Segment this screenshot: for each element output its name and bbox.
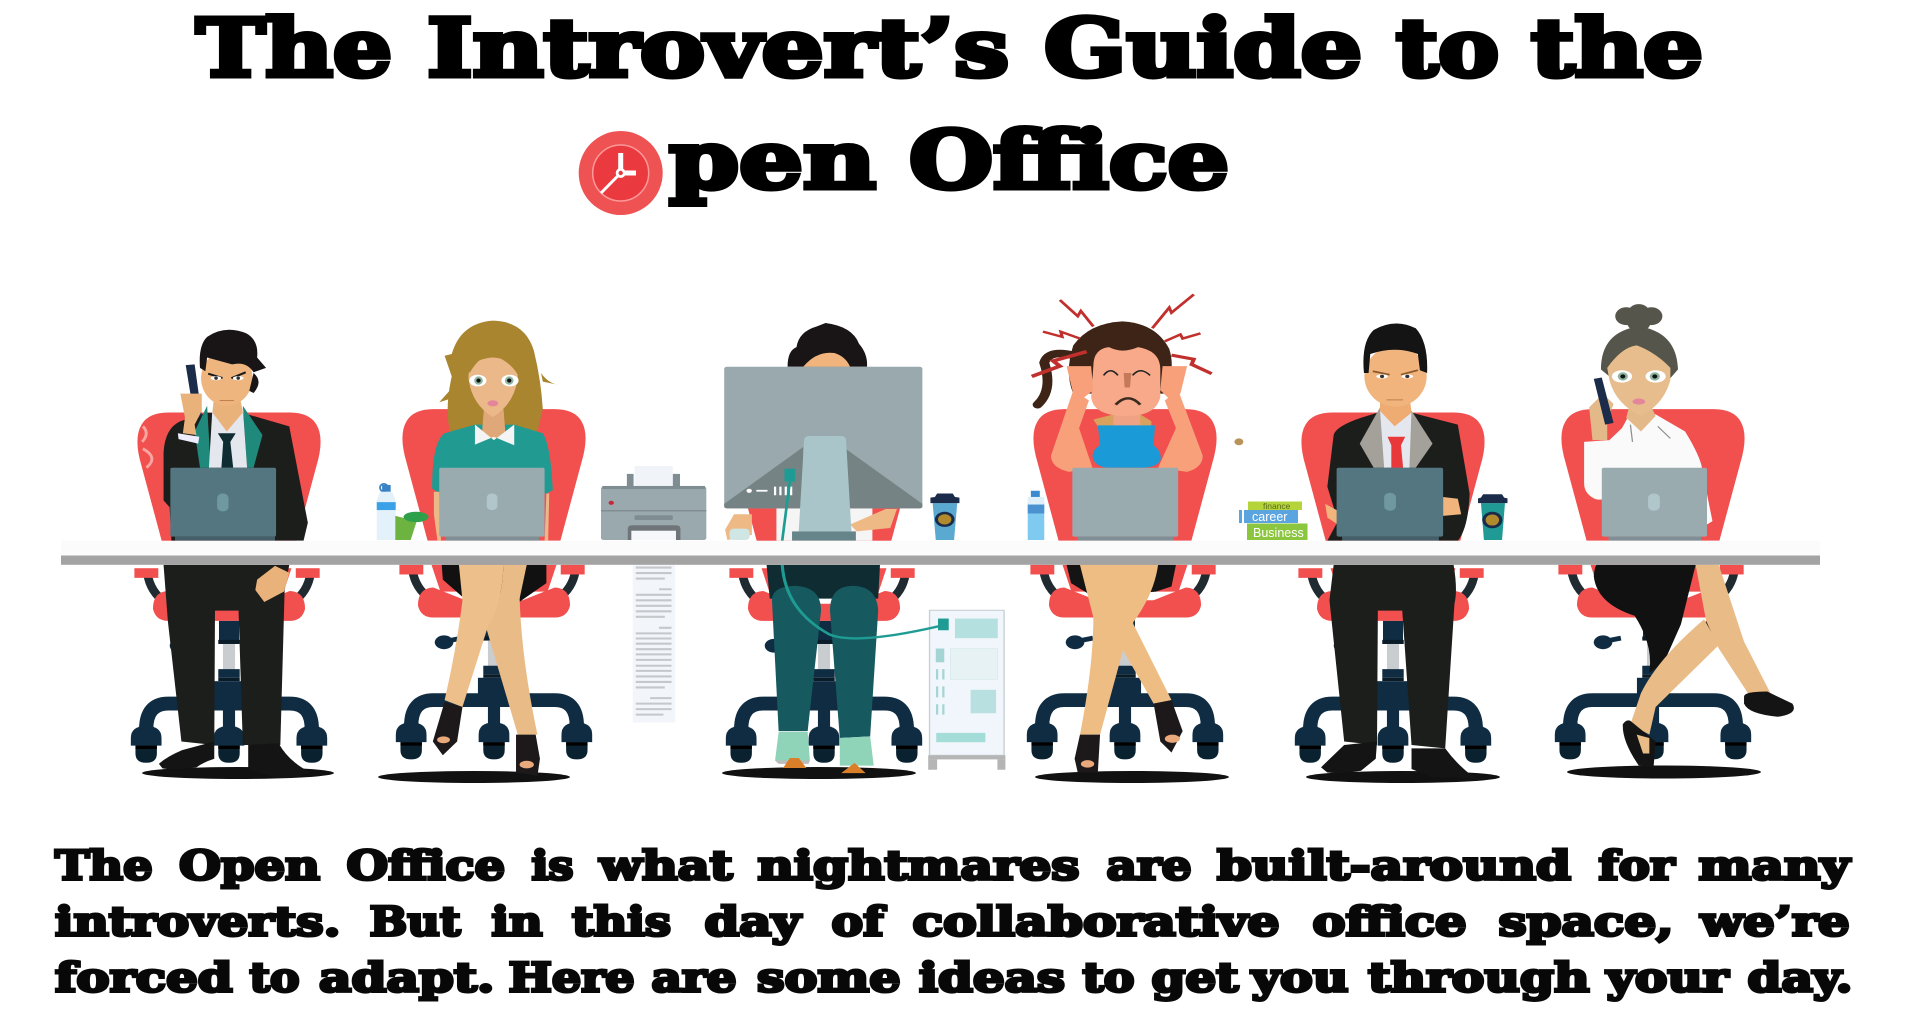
body line three: adapt. (319, 954, 494, 1002)
title line one: Guide (1044, 1, 1362, 95)
body line two: this (572, 898, 671, 946)
chair: woman on phone (1555, 409, 1751, 759)
body line three: to (1082, 954, 1134, 1002)
body line two: office (1312, 898, 1466, 946)
title line one: the (1531, 1, 1703, 95)
body line one: Open (179, 842, 320, 890)
printer and paper output (601, 466, 706, 723)
body line two (55, 898, 1850, 946)
body line one: is (532, 842, 574, 890)
body line one: what (598, 842, 733, 890)
title line one: Introvert’s (427, 1, 1009, 95)
floor shadows (142, 766, 1761, 783)
body line two: But (370, 898, 461, 946)
body line one: are (1106, 842, 1192, 890)
title line one: to (1396, 1, 1499, 95)
icon: stack of books: Business (1253, 526, 1304, 540)
body line three: some (757, 954, 900, 1002)
body line two: introverts. (55, 898, 340, 946)
table (61, 541, 1820, 565)
icon: blue water bottle (1028, 491, 1044, 540)
computer tower with cable (782, 565, 1005, 770)
body line one: nightmares (758, 842, 1080, 890)
body line two: collaborative (912, 898, 1280, 946)
body line one (55, 842, 1852, 890)
title (196, 1, 1703, 215)
person: stressed woman with lightning bolts (1032, 294, 1243, 772)
title line one (196, 1, 1703, 95)
body line one: for (1598, 842, 1676, 890)
person: man with arms crossed (1321, 323, 1475, 778)
body line three: ideas (919, 954, 1065, 1002)
chair: blonde woman (396, 409, 592, 759)
icon: clock as letter O (579, 131, 663, 215)
chair: man behind monitor (726, 413, 922, 763)
body line two: day (704, 898, 803, 946)
body line three: are (652, 954, 736, 1002)
person: man behind monitor (724, 323, 922, 773)
body line three: forced (55, 954, 233, 1002)
body line two: of (832, 898, 887, 946)
title line two (669, 113, 1229, 207)
body line three: through (1368, 954, 1590, 1002)
title line two: pen (669, 113, 876, 207)
icon: blue coffee cup (930, 494, 959, 540)
body line three: your (1605, 954, 1730, 1002)
body line two: in (492, 898, 542, 946)
body line three: day. (1748, 954, 1852, 1002)
person: blonde woman with laptop (432, 321, 559, 776)
icon: stack of books: career (1252, 510, 1287, 524)
body line two: space, (1498, 898, 1674, 946)
icon: stack of books: finance (1263, 501, 1291, 511)
body line three: Here (508, 954, 634, 1002)
chair: man with arms crossed (1295, 413, 1491, 763)
body line one: many (1698, 842, 1852, 890)
chair: man on phone (131, 413, 327, 763)
person: man on phone with laptop (142, 330, 311, 778)
body line one: Office (346, 842, 505, 890)
body text (55, 842, 1852, 1002)
body line three: to (250, 954, 300, 1002)
body line three: get (1152, 954, 1239, 1002)
body line one: built-around (1217, 842, 1571, 890)
title line two: Office (909, 113, 1229, 207)
title line one: The (196, 1, 392, 95)
icon: teal coffee cup (1478, 494, 1507, 540)
body line three: you (1250, 954, 1348, 1002)
body line one: The (55, 842, 152, 890)
body line two: we’re (1699, 898, 1850, 946)
person: woman on phone with bun (1584, 304, 1794, 767)
body line three (55, 954, 1852, 1002)
icon: water bottle and green pepper (377, 484, 429, 540)
chair: stressed woman (1027, 409, 1223, 759)
icon: stack of books (1239, 501, 1308, 540)
